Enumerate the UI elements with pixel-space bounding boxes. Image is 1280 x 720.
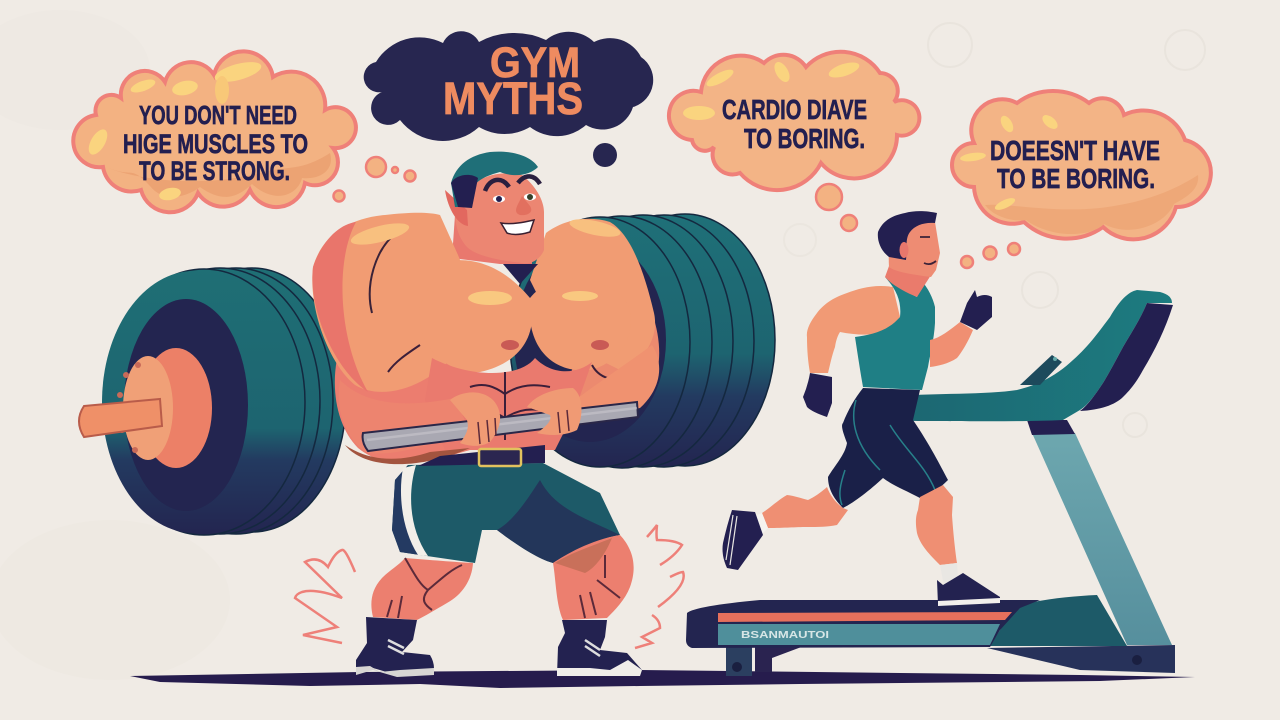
panel: right myth bubble <box>952 91 1211 239</box>
brand text: BSANMAUTOI <box>741 630 829 641</box>
glove back <box>803 373 832 417</box>
bar stub <box>79 399 162 437</box>
front arm <box>930 322 973 367</box>
rear frame hump <box>990 595 1127 646</box>
title text: MYTHS <box>443 73 583 124</box>
text: middle myth: CARDIO DIAVE <box>722 94 867 125</box>
face <box>485 180 509 191</box>
text: middle myth: TO BORING. <box>744 123 865 154</box>
strain marks left <box>295 550 355 643</box>
belt buckle <box>479 449 521 466</box>
abs <box>425 358 592 450</box>
muscle man <box>312 152 659 677</box>
deck <box>686 600 1040 648</box>
strain marks right <box>635 525 684 648</box>
back leg <box>762 487 848 528</box>
ear <box>445 190 468 226</box>
title text: GYM <box>490 39 580 87</box>
title cloud <box>364 31 653 141</box>
text: right myth: DOEESN'T HAVE <box>990 135 1160 166</box>
shorts <box>392 463 620 563</box>
text: middle myth <box>722 94 867 154</box>
barbell bar <box>363 388 638 451</box>
glove front <box>960 290 992 330</box>
upright <box>1032 433 1172 645</box>
front leg <box>916 485 957 565</box>
text: left myth: HIGE MUSCLES TO <box>123 129 308 159</box>
back arm <box>807 286 900 373</box>
head <box>455 173 544 263</box>
front sock <box>940 563 958 586</box>
neck <box>452 215 532 264</box>
right deltoid <box>530 219 655 370</box>
title text <box>443 39 583 124</box>
text: left myth: YOU DON'T NEED <box>139 100 297 130</box>
left forearm <box>339 380 470 454</box>
hair <box>878 211 937 260</box>
text: right myth: TO BE BORING. <box>997 163 1155 194</box>
middle thought bubbles <box>816 184 857 231</box>
treadmill <box>686 290 1175 676</box>
text: left myth <box>123 100 308 186</box>
ground shadow <box>130 670 1195 688</box>
hands <box>450 388 582 446</box>
right leg <box>553 535 634 620</box>
title cloud bubble <box>593 143 617 167</box>
head <box>889 218 940 277</box>
back sock <box>750 513 768 538</box>
panel: middle myth bubble <box>669 52 919 190</box>
shorts <box>828 388 948 508</box>
left leg <box>371 558 473 620</box>
text: right myth <box>990 135 1160 194</box>
back arms and lats <box>335 340 480 463</box>
right forearm <box>578 345 659 420</box>
console <box>872 290 1172 421</box>
left deltoid <box>312 213 470 392</box>
runner <box>722 211 1000 606</box>
right thought bubbles <box>961 243 1020 268</box>
panel: left myth bubble <box>73 51 356 212</box>
left thought bubbles <box>334 157 416 202</box>
barbell left plates <box>79 268 346 535</box>
boots <box>356 617 434 675</box>
text: left myth: TO BE STRONG. <box>139 156 290 186</box>
belt <box>418 445 545 466</box>
barbell right plates <box>510 214 775 468</box>
plate hole <box>124 299 248 511</box>
feet and base <box>726 646 752 676</box>
chest <box>419 260 532 372</box>
back shoe <box>722 510 763 570</box>
front shoe <box>937 573 1000 605</box>
plate hub <box>140 348 212 468</box>
neck <box>885 258 931 297</box>
hair <box>451 152 538 207</box>
tank top <box>855 277 935 390</box>
